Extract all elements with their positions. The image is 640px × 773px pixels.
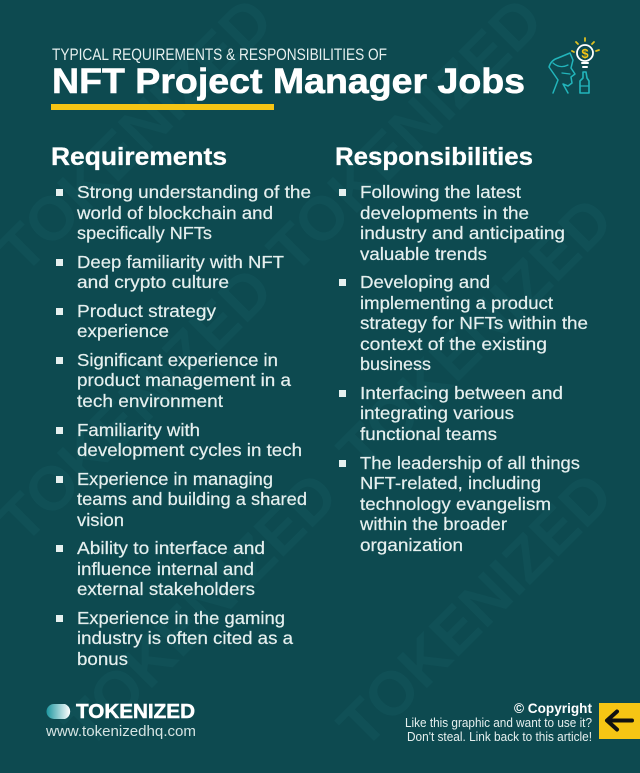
copyright text	[405, 716, 592, 744]
list: responsibilities: NFT-related, including	[360, 473, 541, 493]
copyright text: Don't steal. Link back to this article!	[407, 730, 592, 744]
list: responsibilities: developments in the	[360, 203, 529, 223]
icon: head with light bulb	[549, 38, 599, 93]
list: requirements: world of blockchain and	[76, 203, 273, 223]
text: TOKENIZED	[325, 460, 626, 761]
title underline	[51, 104, 274, 110]
list: requirements: specifically NFTs	[77, 223, 212, 243]
list: requirements: industry is often cited as a	[77, 628, 293, 648]
list: responsibilities: Developing and	[360, 272, 490, 292]
list: responsibilities: context of the existing	[360, 334, 547, 354]
copyright heading: © Copyright	[514, 701, 592, 716]
list: requirements: Significant experience in	[77, 350, 278, 370]
list: requirements: Deep familiarity with NFT	[77, 252, 284, 272]
list: responsibilities: integrating various	[360, 403, 514, 423]
list: responsibilities	[339, 182, 588, 555]
heading: requirements: Requirements	[51, 143, 227, 171]
list: requirements: influence internal and	[77, 559, 254, 579]
list: requirements: tech environment	[77, 391, 223, 411]
list: requirements: Ability to interface and	[77, 538, 265, 558]
list: requirements: Familiarity with	[77, 420, 200, 440]
list: responsibilities: technology evangelism	[360, 494, 551, 514]
list: requirements: Strong understanding of the	[77, 182, 311, 202]
copyright text: Like this graphic and want to use it?	[405, 716, 592, 730]
list: responsibilities: within the broader	[359, 514, 507, 534]
list: requirements: and crypto culture	[77, 272, 229, 292]
list: responsibilities: Following the latest	[360, 182, 521, 202]
list: requirements: Product strategy	[77, 301, 216, 321]
list: responsibilities: valuable trends	[360, 244, 487, 264]
header subtitle: TYPICAL REQUIREMENTS & RESPONSIBILITIES OF	[52, 46, 387, 64]
list: responsibilities: strategy for NFTs within the	[360, 313, 588, 333]
heading: responsibilities: Responsibilities	[335, 143, 533, 171]
list: responsibilities: functional teams	[360, 424, 497, 444]
list: requirements: bonus	[77, 649, 128, 669]
list: responsibilities: implementing a product	[360, 293, 553, 313]
list: responsibilities: Interfacing between and	[360, 383, 563, 403]
list: requirements: Experience in the gaming	[77, 608, 285, 628]
icon: back arrow button	[599, 703, 640, 739]
title: NFT Project Manager Jobs	[52, 62, 525, 101]
list: requirements: experience	[77, 321, 169, 341]
list: requirements: teams and building a shared	[77, 489, 307, 509]
icon: head with light bulb: $	[581, 46, 589, 61]
website url: www.tokenizedhq.com	[45, 723, 196, 740]
list: requirements: external stakeholders	[77, 579, 255, 599]
list: requirements	[56, 182, 311, 669]
list: requirements: development cycles in tech	[77, 440, 302, 460]
list: responsibilities: organization	[360, 535, 463, 555]
text: TOKENIZED	[325, 185, 626, 486]
logo: tokenized: TOKENIZED	[76, 701, 195, 723]
list: requirements: vision	[77, 510, 124, 530]
list: responsibilities: business	[360, 354, 431, 374]
list: responsibilities: The leadership of all things	[360, 453, 580, 473]
text: TOKENIZED	[50, 460, 351, 761]
list: responsibilities: industry and anticipating	[360, 223, 565, 243]
list: requirements: Experience in managing	[77, 469, 273, 489]
list: requirements: product management in a	[77, 370, 291, 390]
